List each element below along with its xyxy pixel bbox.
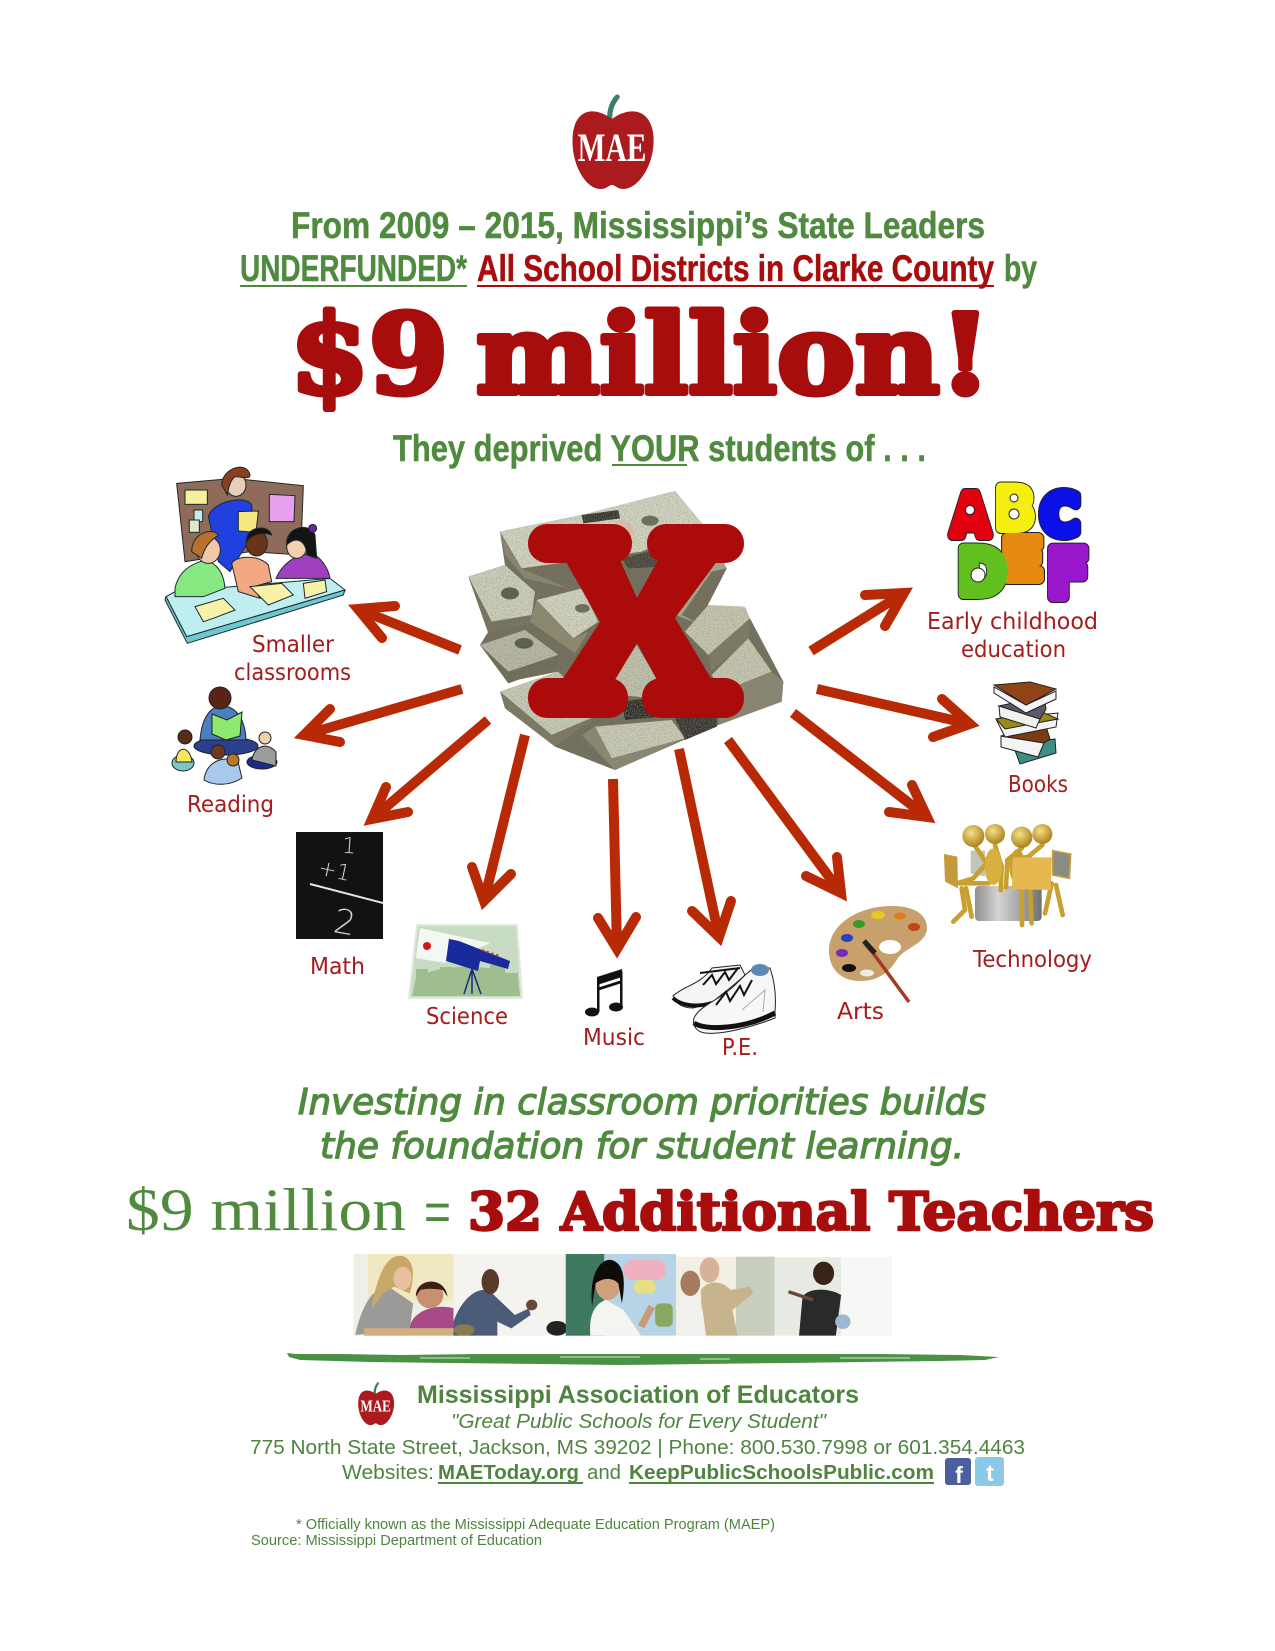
icon: twitter: t <box>986 1460 994 1486</box>
icon: telescope <box>409 925 522 998</box>
logo: small MAE apple <box>358 1383 394 1425</box>
photo: teacher at whiteboard <box>453 1254 567 1336</box>
subheading: deprived: They deprived YOUR students of . . . <box>393 428 926 469</box>
equation: 32 additional teachers: = <box>424 1182 451 1242</box>
icon: alphabet blocks: A <box>952 484 990 549</box>
label: arts: Arts <box>837 999 884 1025</box>
label: books: Books <box>1008 772 1068 798</box>
icon: alphabet blocks: F <box>1047 536 1089 613</box>
label: early childhood education: Early childhood <box>927 609 1098 635</box>
footnote: MAEP and source: Source: Mississippi Department of Education <box>251 1533 542 1549</box>
icon: money stack <box>468 491 783 770</box>
icon: alphabet blocks: C <box>1041 483 1079 547</box>
heading line 2: by <box>1004 248 1037 289</box>
statement: investing in classroom priorities: the foundation for student learning. <box>320 1126 964 1167</box>
footer: organization details: Websites: <box>342 1462 434 1484</box>
icon: alphabet blocks <box>952 477 1089 613</box>
icon: alphabet blocks: D <box>958 536 1006 609</box>
arrow: smaller classrooms <box>358 606 460 650</box>
icon: alphabet blocks: A <box>952 484 990 549</box>
icon: alphabet blocks: E <box>1002 528 1043 593</box>
footer: organization details: KeepPublicSchoolsPublic.com <box>629 1462 934 1484</box>
icon: reading circle <box>172 687 277 784</box>
statement: investing in classroom priorities: Investing in classroom priorities builds <box>298 1082 986 1123</box>
icon: alphabet blocks: C <box>1041 483 1079 547</box>
heading line 1: From 2009 – 2015, Mississippi’s State Leaders <box>291 205 985 246</box>
icon: alphabet blocks: B <box>996 477 1034 541</box>
icon: books <box>994 682 1058 764</box>
footer: organization details: 775 North State Street, Jackson, MS 39202 | Phone: 800.530.7998 or 601.354.4463 <box>250 1437 1025 1459</box>
arrow: books <box>817 689 970 737</box>
photo: teacher with world map <box>566 1254 676 1336</box>
icon: paint palette <box>829 906 927 1002</box>
logo: small MAE apple: MAE <box>361 1397 391 1415</box>
label: early childhood education: education <box>961 637 1066 663</box>
footer: organization details: "Great Public Schools for Every Student" <box>451 1411 827 1433</box>
label: early childhood education <box>927 609 1098 663</box>
arrow: technology <box>793 713 927 817</box>
equation: 32 additional teachers: 32 Additional Teachers <box>468 1182 1154 1243</box>
arrow: arts <box>728 740 841 893</box>
label: math: Math <box>310 954 365 980</box>
icon: music note <box>585 969 623 1016</box>
arrow: early childhood <box>811 593 904 651</box>
icon: math chalkboard: +1 <box>316 856 353 887</box>
icon: alphabet blocks: B <box>996 477 1034 541</box>
icon: alphabet blocks: F <box>1047 536 1089 613</box>
label: reading: Reading <box>187 792 274 818</box>
statement: investing in classroom priorities <box>298 1082 986 1167</box>
icon: technology figures <box>944 824 1071 925</box>
equation: 32 additional teachers: $9 million <box>126 1177 406 1243</box>
icon: math chalkboard <box>296 832 383 945</box>
photo: teacher and girl <box>354 1254 453 1336</box>
footnote: MAEP and source: * Officially known as the Mississippi Adequate Education Program (MAEP) <box>296 1517 775 1533</box>
footer: organization details: MAEToday.org <box>438 1462 579 1484</box>
label: technology: Technology <box>972 947 1092 973</box>
arrow: reading <box>304 689 462 742</box>
equation: 32 additional teachers <box>126 1177 1154 1243</box>
photo: teacher with globe <box>774 1257 892 1336</box>
big number: $9 million: million! <box>476 290 991 419</box>
icon: math chalkboard: 1 <box>341 834 357 860</box>
footer: organization details <box>250 1381 1025 1484</box>
icon: twitter <box>975 1457 1004 1486</box>
logo: MAE apple: MAE <box>578 126 646 170</box>
photo: teacher and student at board <box>676 1257 774 1336</box>
label: smaller classrooms <box>234 632 351 686</box>
arrow: physical education <box>679 749 731 937</box>
icon: facebook <box>945 1458 971 1488</box>
icon: facebook: f <box>955 1462 963 1488</box>
label: smaller classrooms: Smaller <box>252 632 334 658</box>
label: science: Science <box>426 1004 508 1030</box>
label: music: Music <box>583 1025 645 1051</box>
icon: classroom <box>165 467 345 643</box>
big number: $9 million: $9 <box>290 290 448 419</box>
footnote: MAEP and source <box>251 1517 775 1549</box>
icon: alphabet blocks: D <box>958 536 1006 609</box>
heading line 2: All School Districts in Clarke County <box>477 248 994 289</box>
divider: green brush stroke <box>287 1353 999 1365</box>
big number: $9 million <box>290 290 991 419</box>
arrow: math <box>372 720 488 819</box>
footer: organization details: and <box>587 1462 621 1484</box>
icon: red X <box>528 524 744 718</box>
icon: alphabet blocks: E <box>1002 528 1043 593</box>
heading line 2: UNDERFUNDED* <box>240 248 467 289</box>
label: smaller classrooms: classrooms <box>234 660 351 686</box>
logo: MAE apple <box>572 97 654 189</box>
arrow: science <box>472 735 525 901</box>
arrow: music <box>598 779 636 949</box>
icon: sneakers <box>673 964 775 1033</box>
icon: math chalkboard: 2 <box>331 901 359 945</box>
label: physical education: P.E. <box>722 1035 758 1061</box>
photo strip: teachers <box>354 1254 892 1336</box>
footer: organization details: Mississippi Association of Educators <box>417 1381 859 1409</box>
heading line 2 <box>240 248 1037 289</box>
